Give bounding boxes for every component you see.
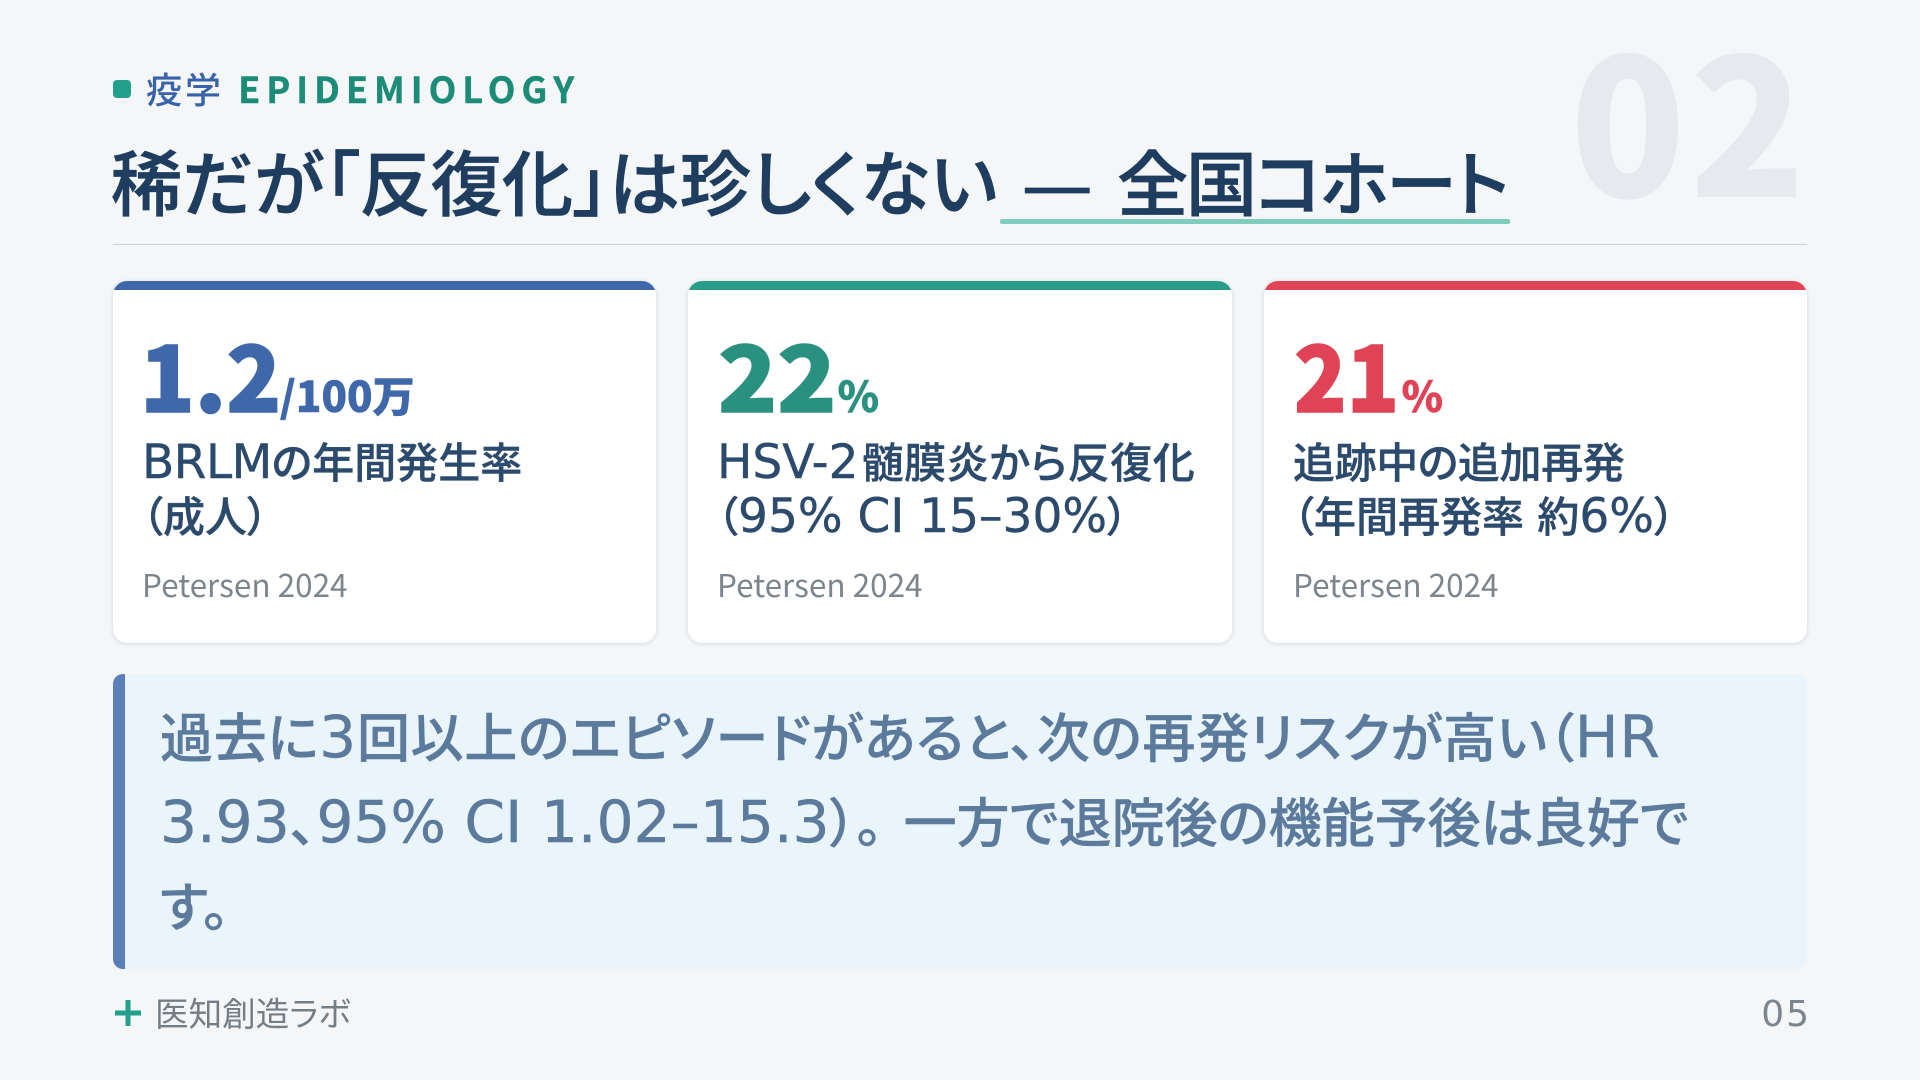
footer brand xyxy=(115,987,351,1036)
stat label: BRLMの年間発生率 xyxy=(142,435,522,490)
stat value: 21 xyxy=(1294,308,1399,438)
stat label: HSV-2髄膜炎から反復化 xyxy=(717,435,1195,490)
stat label: （年間再発率 約6%） xyxy=(1293,489,1675,544)
callout accent bar xyxy=(113,674,125,969)
stat value: % xyxy=(838,364,879,425)
page number: 05 xyxy=(1761,994,1811,1035)
callout text: す。 xyxy=(160,878,229,939)
source: Petersen 2024 xyxy=(1293,561,1499,607)
stat label: （95% CI 15–30%） xyxy=(717,489,1128,544)
card accent bar xyxy=(113,281,656,290)
callout text xyxy=(160,703,1689,939)
section label text: 疫学 EPIDEMIOLOGY xyxy=(146,62,580,114)
stat label: （成人） xyxy=(142,493,268,542)
title underline xyxy=(1000,219,1510,224)
panel: additional relapse stat card xyxy=(1264,281,1807,643)
icon: square bullet xyxy=(113,80,131,98)
source: Petersen 2024 xyxy=(142,561,348,607)
stat value: 22 xyxy=(718,308,836,438)
card accent bar xyxy=(1264,281,1807,290)
card accent bar xyxy=(688,281,1232,290)
stat label xyxy=(142,435,522,542)
panel: recurrence stat card xyxy=(688,281,1232,643)
stat label xyxy=(1293,439,1675,544)
callout text: 過去に3回以上のエピソードがあると、次の再発リスクが高い（HR xyxy=(160,703,1661,771)
stat label: 追跡中の追加再発 xyxy=(1293,439,1624,488)
callout text: 3.93、95% CI 1.02–15.3）。 一方で退院後の機能予後は良好で xyxy=(160,788,1689,856)
stat value: 1.2/100万 xyxy=(140,308,415,438)
section label xyxy=(113,62,580,114)
stat label xyxy=(717,435,1195,544)
source: Petersen 2024 xyxy=(717,561,923,607)
icon: plus xyxy=(115,1000,141,1026)
stat value: % xyxy=(1402,364,1443,425)
title: 稀だが「反復化」は珍しくない — 全国コホート xyxy=(111,144,1507,227)
brand name: 医知創造ラボ xyxy=(155,987,351,1036)
callout xyxy=(113,674,1807,969)
header divider xyxy=(113,244,1807,245)
panel: incidence stat card xyxy=(113,281,656,643)
